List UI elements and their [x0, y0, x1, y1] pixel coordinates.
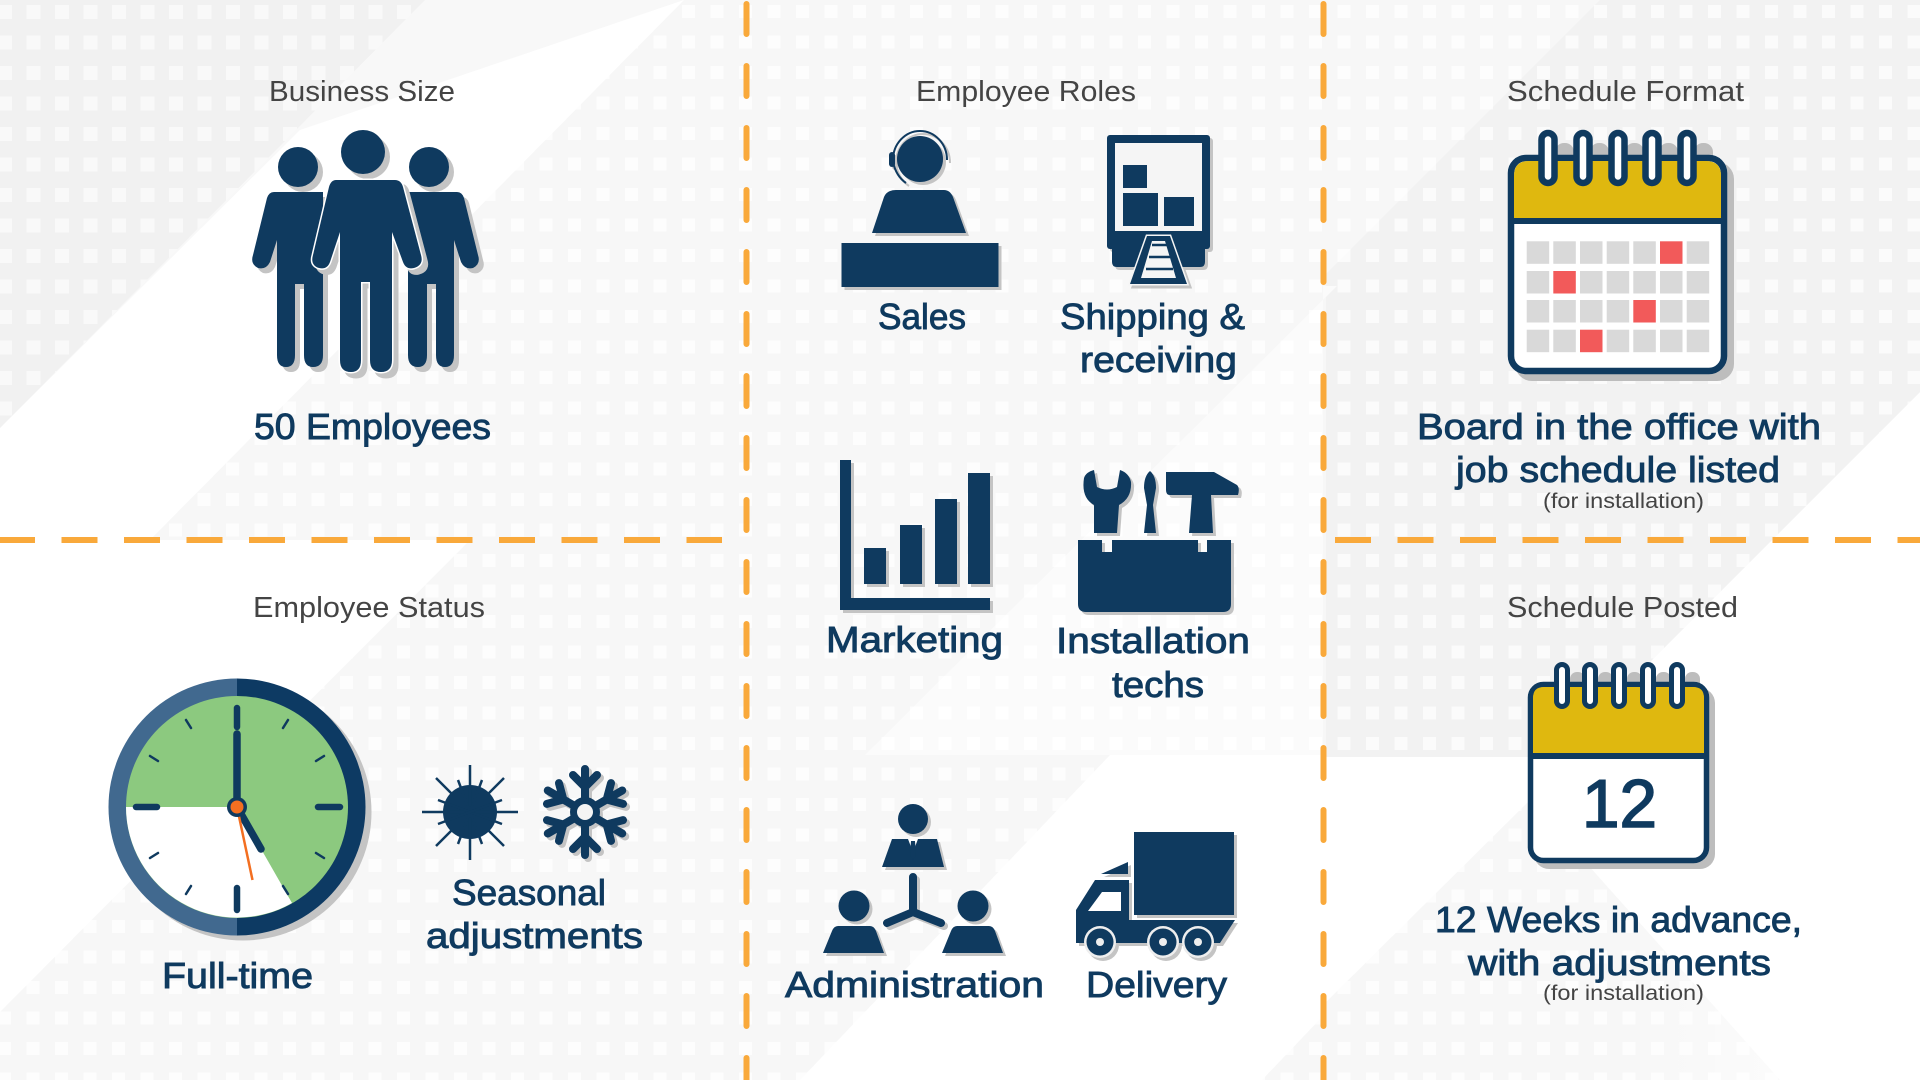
- label: 50 employees: 50 Employees: [254, 406, 491, 447]
- label: seasonal adjustments: [426, 872, 643, 956]
- label: delivery: Delivery: [1086, 964, 1227, 1005]
- icon: three people: [252, 130, 479, 372]
- icon: shipping and receiving: [1107, 135, 1210, 284]
- note: for installation: (for installation): [1543, 490, 1704, 513]
- label: seasonal adjustments: adjustments: [426, 915, 643, 956]
- icon: clock: [108, 678, 372, 940]
- label: installation techs: [1056, 620, 1250, 705]
- label: board in the office: [1417, 406, 1821, 490]
- label: shipping and receiving: [1060, 296, 1245, 380]
- label: full-time: Full-time: [162, 955, 313, 996]
- icon: day calendar: [1528, 664, 1715, 869]
- label: sales: Sales: [878, 296, 966, 337]
- panel: employee roles: [785, 76, 1250, 1005]
- icon: sun: [422, 765, 518, 860]
- icon: bar chart: [840, 460, 990, 610]
- icon: administration: [823, 804, 1003, 953]
- panel: business size: [252, 76, 491, 447]
- icon: month calendar: [1508, 133, 1734, 381]
- label: installation techs: techs: [1112, 664, 1204, 705]
- icon: delivery truck: [1076, 832, 1235, 958]
- label: board in the office: Board in the office with: [1417, 406, 1821, 447]
- icon: toolbox: [1078, 470, 1239, 612]
- label: installation techs: Installation: [1056, 620, 1250, 661]
- panel: schedule posted: [1435, 592, 1802, 1005]
- label: shipping and receiving: Shipping &: [1060, 296, 1245, 337]
- date number: 12: [1582, 766, 1657, 842]
- label: shipping and receiving: receiving: [1080, 339, 1237, 380]
- label: twelve weeks in advance: [1435, 899, 1802, 983]
- icon: snowflake: [542, 769, 628, 855]
- label: marketing: Marketing: [826, 619, 1003, 660]
- heading: business size: Business Size: [269, 76, 455, 108]
- heading: employee roles: Employee Roles: [916, 76, 1136, 108]
- heading: schedule format: Schedule Format: [1507, 76, 1744, 108]
- label: seasonal adjustments: Seasonal: [452, 872, 606, 913]
- note: for installation: (for installation): [1543, 982, 1704, 1005]
- label: board in the office: job schedule listed: [1455, 449, 1780, 490]
- panel: schedule format: [1417, 76, 1821, 513]
- label: administration: Administration: [785, 964, 1044, 1005]
- icon: sales person at desk: [842, 131, 998, 287]
- heading: employee status: Employee Status: [253, 592, 485, 624]
- heading: schedule posted: Schedule Posted: [1507, 592, 1738, 624]
- label: twelve weeks in advance: with adjustments: [1467, 942, 1771, 983]
- panel: employee status: [108, 592, 643, 996]
- label: twelve weeks in advance: 12 Weeks in advance,: [1435, 899, 1802, 940]
